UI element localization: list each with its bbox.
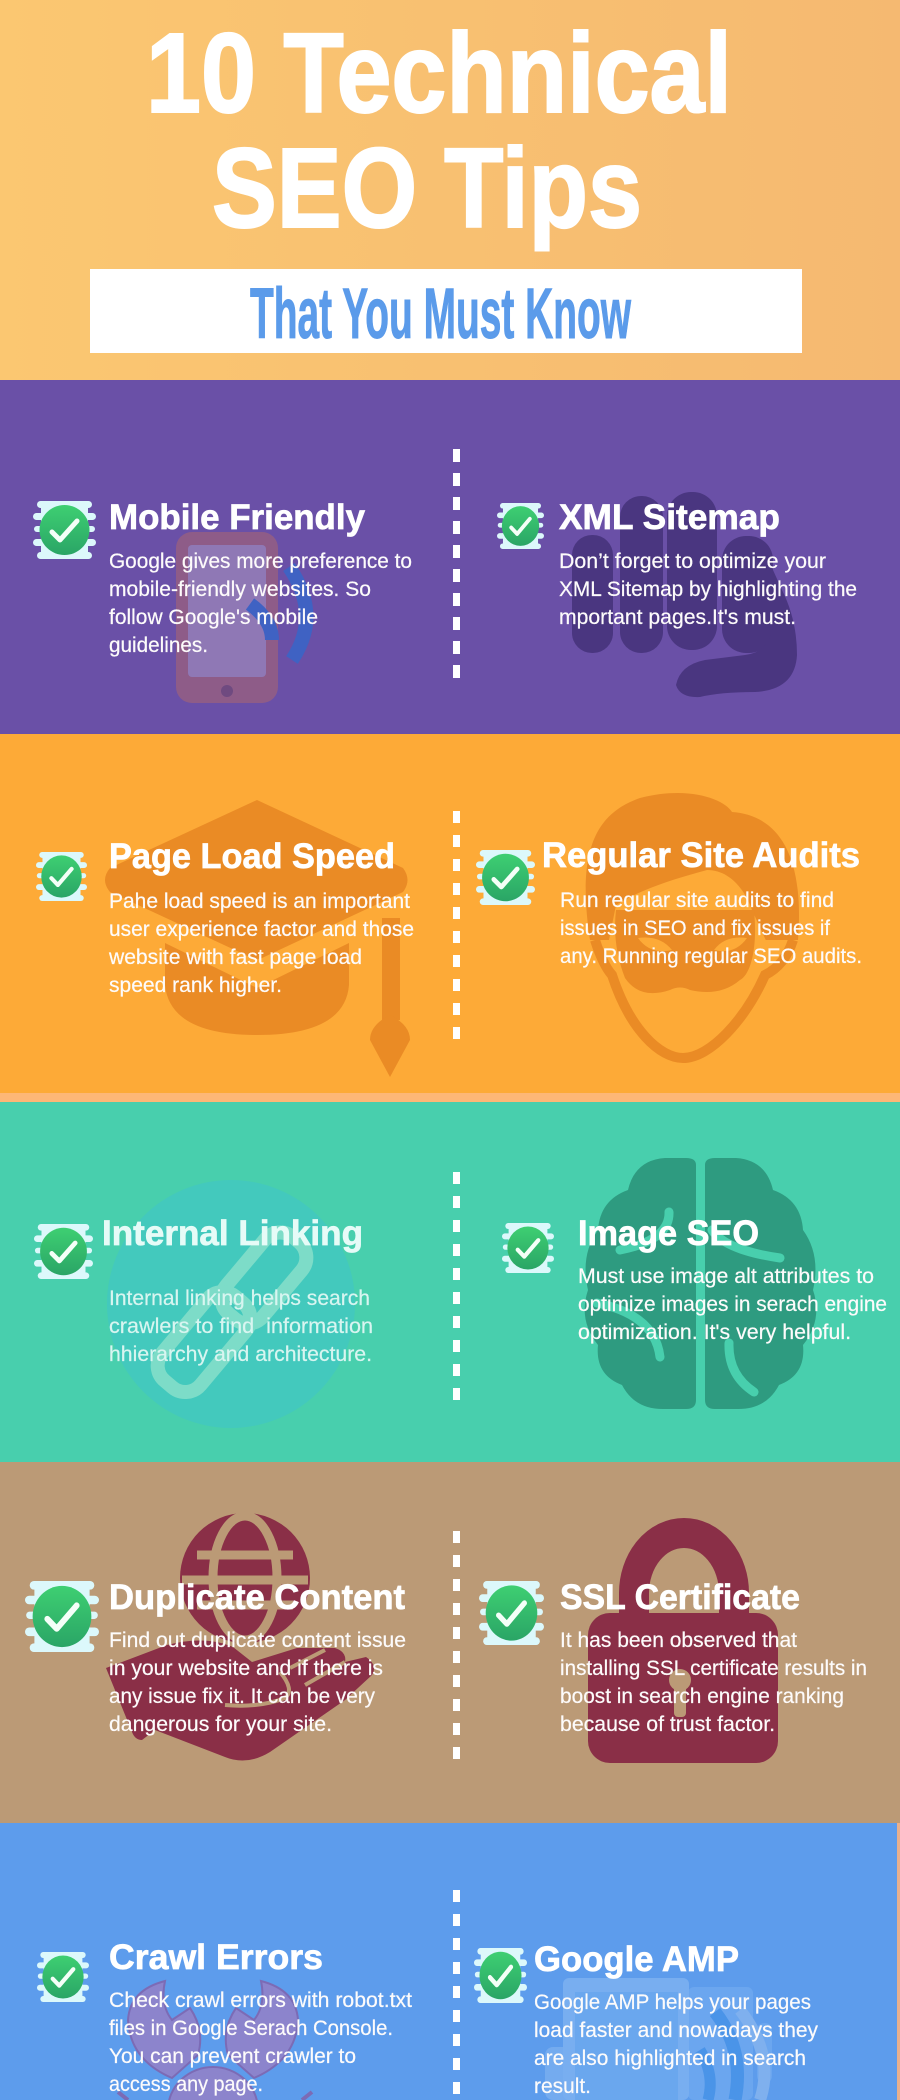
text: page load speed: website with fast page load [108, 946, 362, 969]
text: image seo: optimization. It's very helpful. [578, 1321, 851, 1344]
icon: check badge [502, 1223, 554, 1273]
icon: check badge [36, 852, 87, 901]
text: mobile friendly: mobile-friendly websites. So [109, 578, 371, 601]
divider [453, 811, 460, 1039]
text: mobile friendly: Google gives more preference to [109, 550, 412, 573]
text: regular site audits: issues in SEO and fix issues if [560, 917, 830, 940]
text: image seo: Must use image alt attributes to [578, 1265, 874, 1288]
text: image seo [578, 1265, 887, 1344]
subtitle banner [90, 269, 802, 354]
text: page load speed: Pahe load speed is an important [109, 890, 410, 913]
header panel [0, 0, 900, 380]
divider [453, 1890, 460, 2094]
heading: crawl errors: Crawl Errors [109, 1938, 323, 1977]
text: ssl certificate: boost in search engine ranking [560, 1685, 844, 1708]
icon: check badge [33, 501, 96, 559]
icon: padlock [588, 1533, 778, 1763]
text: regular site audits [560, 889, 862, 968]
heading: internal linking: Internal Linking [102, 1214, 363, 1253]
icon: check badge [25, 1581, 99, 1652]
text: page load speed: speed rank higher. [109, 974, 282, 997]
text: ssl certificate [560, 1629, 867, 1736]
text: xml sitemap [559, 550, 857, 629]
text: google amp: are also highlighted in search [534, 2047, 806, 2070]
text: google amp: Google AMP helps your pages [534, 1991, 811, 2014]
icon: check badge [479, 1581, 544, 1645]
icon: fist [572, 492, 797, 697]
icon: check badge [34, 1224, 93, 1279]
icon: check badge [474, 1948, 527, 2003]
text: duplicate content: any issue fix it. It can be very [109, 1685, 375, 1708]
text: google amp: result. [534, 2075, 591, 2098]
text: mobile friendly [109, 550, 412, 657]
heading: regular site audits: Regular Site Audits [542, 836, 860, 875]
text: crawl errors: You can prevent crawler to [109, 2045, 356, 2068]
text: crawl errors [109, 1989, 412, 2096]
text: xml sitemap: mportant pages.It's must. [559, 606, 796, 629]
text: google amp: load faster and nowadays they [534, 2019, 818, 2042]
text: duplicate content [109, 1629, 406, 1736]
icon: amp phone with signal [545, 1978, 772, 2100]
text: crawl errors: Check crawl errors with robot.txt [109, 1989, 412, 2012]
heading: page load speed: Page Load Speed [109, 837, 395, 876]
panel: blue row [0, 1823, 900, 2100]
text: mobile friendly: guidelines. [109, 634, 208, 657]
panel: teal row [0, 1102, 900, 1462]
panel: purple row [0, 380, 900, 734]
icon: globe in hand [106, 1513, 374, 1761]
icon: check badge [476, 850, 535, 905]
text: ssl certificate: because of trust factor. [560, 1713, 775, 1736]
text: internal linking: crawlers to find information [109, 1315, 373, 1338]
text: regular site audits: Run regular site audits to find [560, 889, 834, 912]
text: crawl errors: access any page. [109, 2073, 263, 2096]
text: image seo: optimize images in serach engine [578, 1293, 887, 1316]
text: internal linking: hhierarchy and architecture. [109, 1343, 372, 1366]
text: duplicate content: in your website and if there is [109, 1657, 383, 1680]
text: duplicate content: dangerous for your site. [109, 1713, 332, 1736]
divider [453, 1531, 460, 1759]
icon: phone with signal [176, 532, 306, 703]
title: SEO Tips [212, 125, 642, 251]
heading: duplicate content: Duplicate Content [109, 1578, 405, 1617]
title: 10 Technical [146, 10, 732, 136]
icon: check badge [37, 1952, 89, 2002]
panel: orange row [0, 734, 900, 1102]
icon: graduation cap [105, 800, 410, 1077]
icon: check badge [497, 503, 544, 549]
text: page load speed [108, 890, 414, 997]
heading: image seo: Image SEO [578, 1214, 759, 1253]
text: ssl certificate: It has been observed that [560, 1629, 797, 1652]
heading: ssl certificate: SSL Certificate [560, 1578, 800, 1617]
heading: mobile friendly: Mobile Friendly [109, 498, 366, 537]
divider [453, 449, 460, 678]
text: mobile friendly: follow Google's mobile [109, 606, 318, 629]
text: regular site audits: any. Running regular SEO audits. [560, 945, 862, 968]
text: crawl errors: files in Google Serach Console. [109, 2017, 393, 2040]
icon: head with glasses [586, 793, 799, 1058]
heading: xml sitemap: XML Sitemap [559, 498, 780, 537]
text: xml sitemap: Don’t forget to optimize your [559, 550, 826, 573]
text: internal linking [109, 1287, 373, 1366]
text: google amp [534, 1991, 818, 2098]
text: page load speed: user experience factor and those [109, 918, 414, 941]
icon: crab [118, 1981, 312, 2100]
divider [453, 1172, 460, 1400]
panel: tan row [0, 1462, 900, 1823]
text: duplicate content: Find out duplicate content issue [109, 1629, 406, 1652]
text: ssl certificate: installing SSL certificate results in [560, 1657, 867, 1680]
text: xml sitemap: XML Sitemap by highlighting the [559, 578, 857, 601]
text: internal linking: Internal linking helps search [109, 1287, 370, 1310]
heading: google amp: Google AMP [534, 1940, 739, 1979]
icon: brain [585, 1158, 816, 1409]
title [146, 10, 732, 251]
icon: chain link in circle [107, 1180, 355, 1428]
